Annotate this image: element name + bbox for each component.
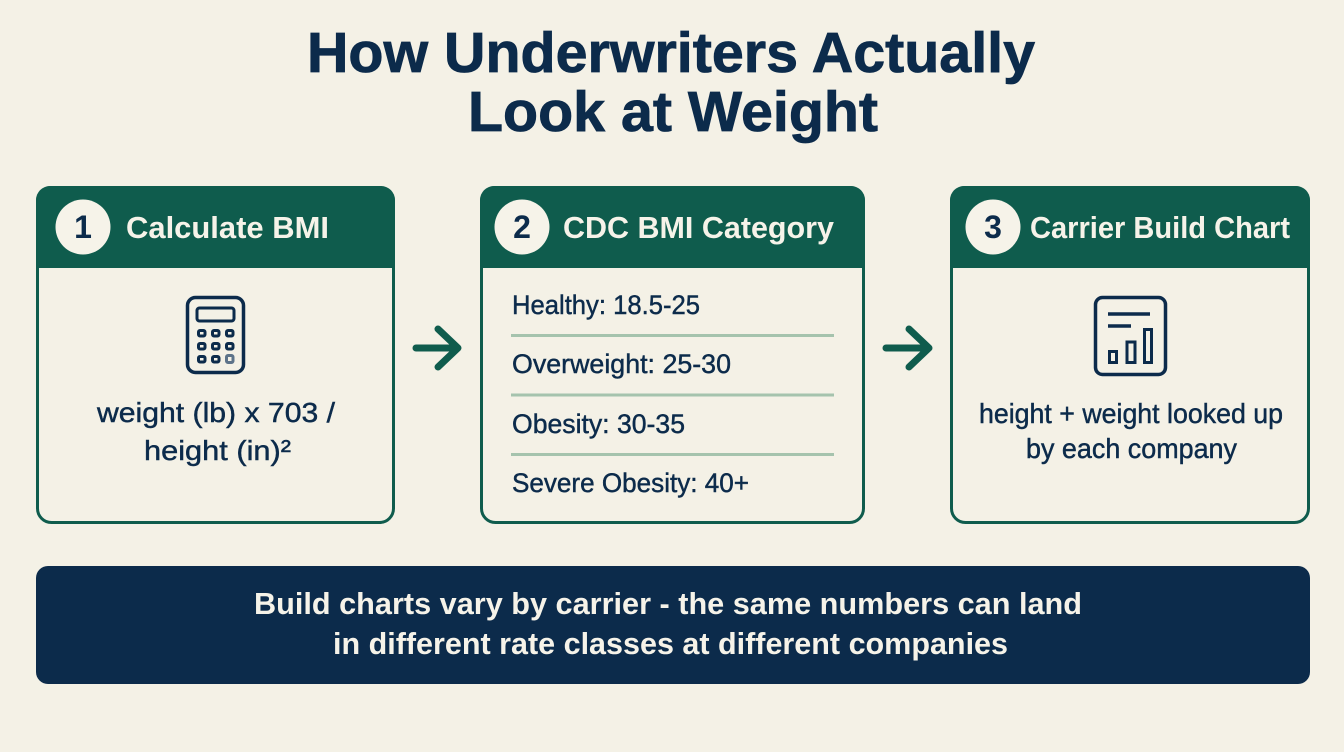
BMI category list: Obesity: 30-35 [512,409,685,439]
step 3 header: 3 [984,209,1002,245]
step 3 header [950,186,1310,268]
arrow: step 2 to step 3 [886,329,929,367]
build chart description: height + weight looked up [979,398,1283,429]
step 2 header [480,186,865,268]
BMI category list: Severe Obesity: 40+ [512,468,749,498]
panel: step 1 calculate BMI [36,186,395,522]
callout banner: in different rate classes at different companies [333,626,1008,661]
title: How Underwriters Actually [307,21,1035,85]
step 2 header: CDC BMI Category [563,210,835,245]
title [307,21,1035,144]
panel: step 2 CDC BMI category [480,186,865,522]
step 2 header: 2 [513,209,531,245]
panel: step 3 carrier build chart [950,186,1310,522]
BMI category list: Overweight: 25-30 [512,349,731,379]
BMI category list: Healthy: 18.5-25 [512,290,700,320]
title: Look at Weight [468,80,878,144]
step 1 header [36,186,395,268]
icon: build chart [1096,298,1166,374]
formula text: height (in)² [144,435,291,466]
formula text [96,397,335,466]
callout banner [36,566,1310,684]
build chart description [979,398,1283,464]
step 1 header: 1 [74,209,92,245]
BMI category list [511,290,834,498]
callout banner: Build charts vary by carrier - the same numbers can land [254,586,1082,621]
formula text: weight (lb) x 703 / [96,397,335,428]
step 1 header: Calculate BMI [126,210,329,245]
arrow: step 1 to step 2 [416,329,458,367]
step 3 header: Carrier Build Chart [1030,210,1290,245]
icon: calculator [188,298,244,372]
build chart description: by each company [1026,433,1237,464]
